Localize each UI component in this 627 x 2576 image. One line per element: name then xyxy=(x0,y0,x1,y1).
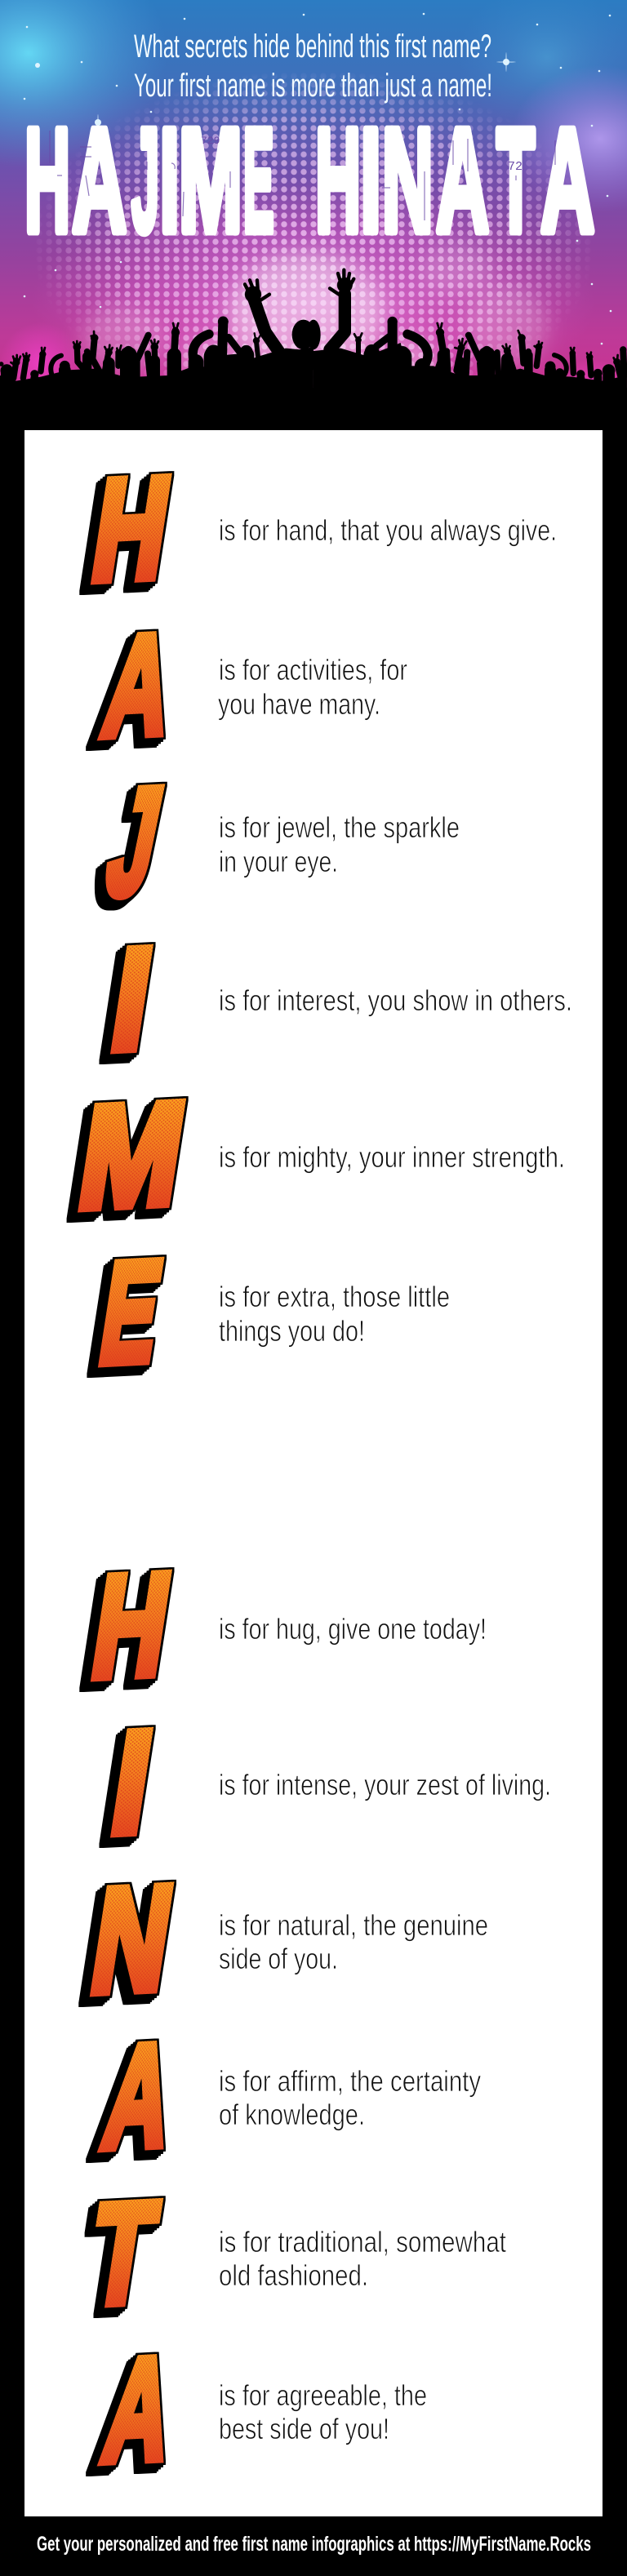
line: E: things you do! xyxy=(219,1314,365,1348)
line: N: side of you. xyxy=(219,1942,338,1975)
crowd silhouette: right half xyxy=(306,270,627,424)
title: first name xyxy=(24,98,274,263)
comic letter: M: M xyxy=(69,1072,194,1238)
title distress marks xyxy=(50,131,555,220)
crowd silhouette: left half xyxy=(0,280,315,424)
comic letter: A: A xyxy=(95,2327,183,2493)
title: first name: A xyxy=(72,99,127,263)
title: last name: H xyxy=(315,99,361,263)
line: I: is for intense, your zest of living. xyxy=(219,1768,551,1801)
line: H: is for hug, give one today! xyxy=(219,1612,487,1646)
line: A: is for affirm, the certainty xyxy=(219,2064,481,2098)
comic letter: N: N xyxy=(82,1856,182,2024)
title: first name: H xyxy=(24,99,70,263)
header banner background xyxy=(0,0,627,424)
comic letter: H: H xyxy=(83,1544,180,1708)
line: J: is for jewel, the sparkle xyxy=(219,811,460,844)
title: last name: A xyxy=(540,100,594,263)
line: T: old fashioned. xyxy=(219,2258,368,2292)
line: J xyxy=(219,811,460,878)
comic letter: E: E xyxy=(91,1231,171,1393)
line: A xyxy=(219,2378,427,2445)
line: E: is for extra, those little xyxy=(219,1280,450,1313)
comic letter: A: A xyxy=(95,2014,183,2179)
title: last name: A xyxy=(436,99,489,263)
comic letter: A: A xyxy=(95,604,182,766)
comic letter: J: J xyxy=(96,756,174,927)
line: E xyxy=(219,1280,450,1348)
title: last name: T xyxy=(496,100,535,263)
comic letter: T: T xyxy=(82,2172,165,2334)
line: J: in your eye. xyxy=(219,845,338,878)
title distress marks: 72 xyxy=(508,160,522,174)
black band under crowd xyxy=(0,388,627,431)
white content panel xyxy=(24,430,603,2516)
line: A: is for agreeable, the xyxy=(219,2378,427,2412)
line: A xyxy=(218,653,407,721)
sparkles xyxy=(24,13,611,382)
line: N: is for natural, the genuine xyxy=(219,1908,488,1942)
title: last name: I xyxy=(360,99,381,263)
line: T xyxy=(219,2225,506,2292)
comic letter: H: H xyxy=(83,447,180,611)
comic letter: I: I xyxy=(102,918,162,1081)
line: A xyxy=(219,2064,481,2131)
line: A: is for activities, for xyxy=(219,653,407,686)
comic letter: I: I xyxy=(102,1702,162,1864)
line: A: you have many. xyxy=(218,687,380,721)
title: first name: J xyxy=(131,98,159,263)
line: A: of knowledge. xyxy=(219,2098,365,2131)
title: last name: N xyxy=(382,98,434,262)
tagline xyxy=(134,29,492,104)
title: first name: M xyxy=(179,99,242,263)
line: A: best side of you! xyxy=(219,2412,389,2445)
title: first name: E xyxy=(243,99,274,263)
title: last name xyxy=(315,98,594,263)
line: T: is for traditional, somewhat xyxy=(219,2225,506,2258)
line: N xyxy=(219,1908,488,1975)
title distress marks: 729 xyxy=(201,135,220,147)
title: first name: I xyxy=(159,100,180,263)
